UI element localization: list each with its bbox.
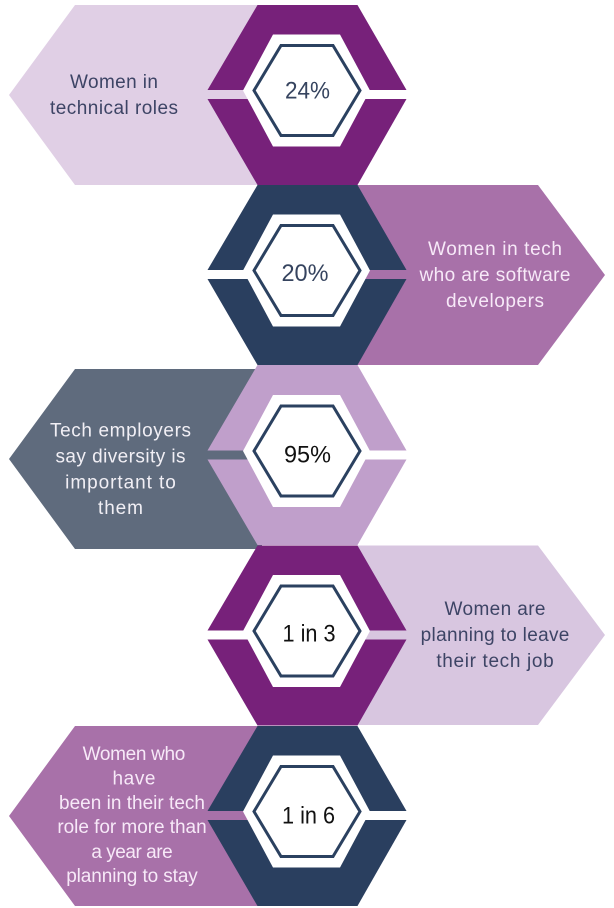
panel: women in technical roles (9, 5, 406, 185)
text: women who have been in their tech role for more than a year are planning to stay: a year are (91, 842, 173, 863)
hexagon frame: navy (208, 726, 406, 906)
text: women who have been in their tech role for more than a year are planning to stay: been in their tech (59, 793, 205, 814)
text: women are planning to leave their tech job: Women are (444, 599, 546, 620)
text: women in tech who are software developers: who are software (418, 265, 570, 286)
number: 20%: 20% (282, 260, 328, 287)
panel: women planning to leave (208, 546, 605, 726)
hexagon: white centre with outline (243, 34, 370, 146)
text: women who have been in their tech role for more than a year are planning to stay: have (112, 768, 156, 790)
panel: women who are software developers (208, 185, 605, 365)
hexagon: white centre with outline (243, 214, 370, 326)
text: tech employers say diversity is important to them (50, 420, 191, 519)
arrow: right pointing light lilac (352, 546, 605, 725)
panel: tech employers on diversity (9, 365, 406, 549)
text: women in technical roles: Women in (70, 72, 158, 93)
hexagon: white centre with outline (243, 395, 370, 507)
number: 1 in 3: 1 in 3 (282, 621, 336, 648)
text: women in technical roles (50, 72, 178, 119)
text: tech employers say diversity is important to them: them (98, 498, 143, 519)
hexagon frame: navy (208, 185, 406, 365)
text: women are planning to leave their tech job (421, 599, 569, 672)
arrow: right pointing mid purple (352, 185, 605, 365)
text: women are planning to leave their tech job: planning to leave (421, 625, 569, 646)
number: 24%: 24% (285, 77, 330, 104)
hexagon frame: purple (208, 5, 406, 185)
arrow: left pointing light lilac (9, 5, 262, 185)
text: women in tech who are software developers (418, 239, 570, 312)
hexagon: white centre with outline (243, 756, 370, 868)
text: tech employers say diversity is important to them: Tech employers (50, 420, 191, 442)
text: tech employers say diversity is important to them: say diversity is (56, 446, 186, 467)
arrow: left pointing slate grey (9, 369, 262, 549)
hexagon frame: lilac (208, 365, 406, 545)
arrow: left pointing mid purple (9, 726, 262, 906)
text: women in tech who are software developers: developers (446, 291, 544, 312)
number: 1 in 6: 1 in 6 (282, 802, 335, 829)
text: women in tech who are software developers: Women in tech (428, 239, 562, 260)
hexagon frame: purple (208, 546, 406, 726)
text: tech employers say diversity is important to them: important to (65, 472, 176, 493)
text: women who have been in their tech role for more than a year are planning to stay: planning to stay (66, 866, 198, 887)
text: women who have been in their tech role for more than a year are planning to stay: role for more than (57, 817, 207, 838)
number: 95%: 95% (284, 442, 331, 469)
text: women who have been in their tech role for more than a year are planning to stay: Women who (83, 744, 185, 765)
hexagon: white centre with outline (243, 575, 370, 687)
text: women in technical roles: technical roles (50, 98, 178, 119)
panel: women planning to stay (9, 726, 406, 906)
text: women are planning to leave their tech job: their tech job (436, 651, 554, 672)
text: women who have been in their tech role for more than a year are planning to stay (57, 744, 207, 887)
